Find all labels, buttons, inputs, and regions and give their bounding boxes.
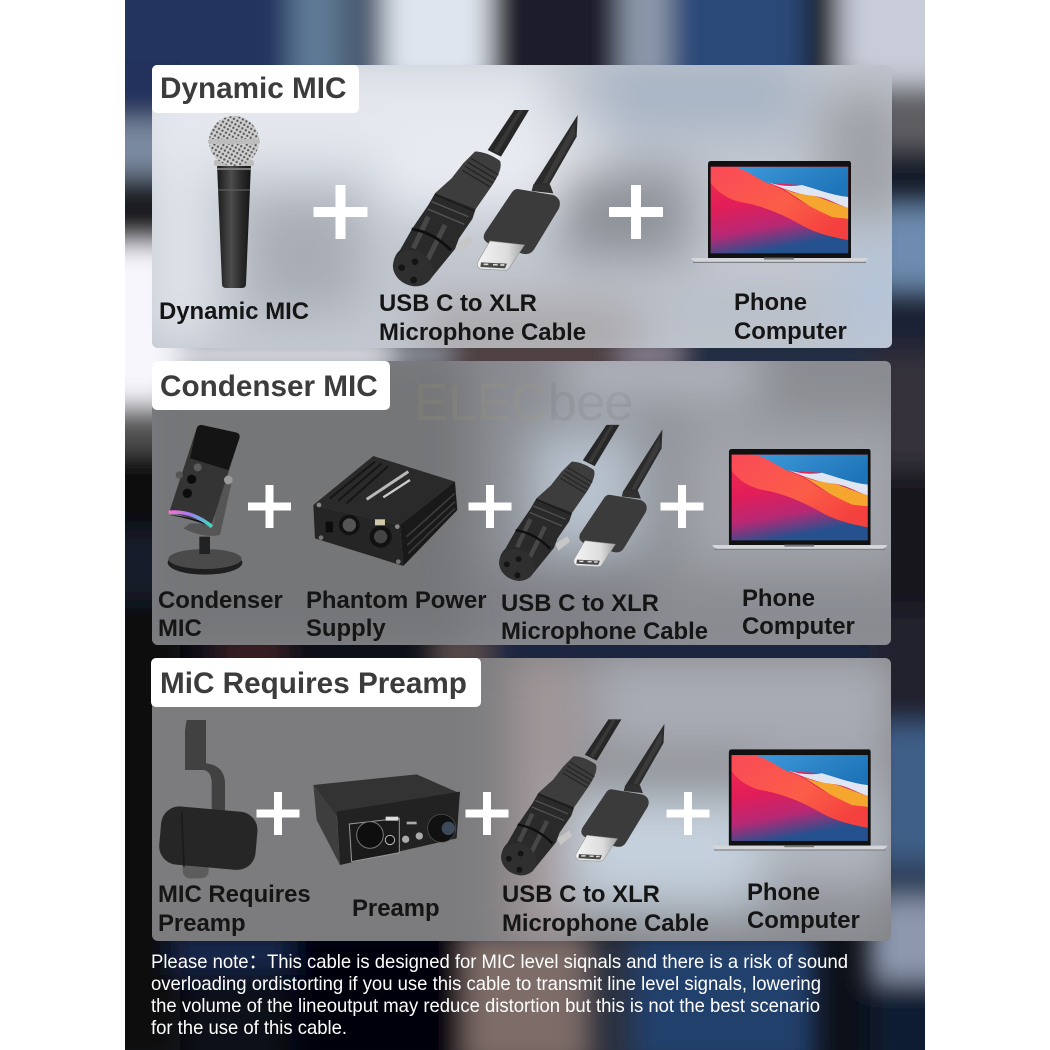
- icon: microphone with foam windscreen: [158, 720, 259, 878]
- panel: Dynamic MIC: [152, 65, 892, 348]
- text block: please note: [151, 951, 848, 1039]
- heading: Condenser MIC: [152, 361, 390, 410]
- icon: laptop: [691, 161, 868, 263]
- label: USB C to XLR Microphone Cable: USB C to XLR: [379, 290, 537, 317]
- label: Preamp: Preamp: [352, 895, 440, 922]
- label: USB C to XLR Microphone Cable: [501, 590, 708, 645]
- plus sign: [256, 792, 300, 835]
- plus sign: [466, 792, 508, 835]
- label: Phone Computer: Computer: [734, 318, 847, 345]
- plus sign: [314, 185, 368, 239]
- heading: MiC Requires Preamp: [151, 658, 481, 707]
- label: USB C to XLR Microphone Cable: Microphone Cable: [379, 319, 586, 346]
- watermark: ELECbee: [414, 374, 633, 432]
- text block: please note: the volume of the lineoutput may reduce distortion but this is not the best scenario: [151, 995, 820, 1017]
- icon: laptop: [712, 749, 888, 851]
- plus sign: [660, 485, 704, 528]
- label: Condenser MIC: Condenser: [158, 587, 283, 614]
- label: USB C to XLR Microphone Cable: [502, 881, 709, 937]
- heading: MiC Requires Preamp: MiC Requires Preamp: [160, 667, 467, 700]
- panel background: [152, 65, 892, 348]
- label: USB C to XLR Microphone Cable: USB C to XLR: [502, 881, 660, 908]
- label: Phone Computer: [747, 879, 860, 934]
- panel background: [152, 361, 891, 645]
- label: USB C to XLR Microphone Cable: Microphone Cable: [502, 910, 709, 937]
- panel: Condenser MIC: [152, 361, 891, 645]
- label: USB C to XLR Microphone Cable: Microphone Cable: [501, 618, 708, 645]
- label: USB C to XLR Microphone Cable: USB C to XLR: [501, 590, 659, 617]
- label: Dynamic MIC: Dynamic MIC: [159, 298, 309, 325]
- label: Phantom Power Supply: Supply: [306, 615, 386, 642]
- label: Phantom Power Supply: Phantom Power: [306, 587, 487, 614]
- panel: MIC Requires Preamp: [151, 650, 900, 955]
- icon: dynamic microphone: [208, 116, 260, 288]
- icon: condenser microphone: [168, 425, 242, 575]
- heading: Condenser MIC: Condenser MIC: [160, 370, 378, 403]
- text block: please note: overloading ordistorting if you use this cable to transmit line level signals, lowering: [151, 973, 821, 995]
- plus sign: [666, 792, 710, 835]
- heading: Dynamic MIC: [152, 65, 359, 113]
- label: USB C to XLR Microphone Cable: [379, 290, 586, 346]
- label: MIC Requires Preamp: Preamp: [158, 910, 246, 937]
- label: Phone Computer: Computer: [747, 907, 860, 934]
- text block: please note: Please note：This cable is designed for MIC level siqnals and there is a risk of sound: [151, 951, 848, 973]
- label: MIC Requires Preamp: MIC Requires: [158, 881, 311, 908]
- text block: please note: for the use of this cable.: [151, 1017, 347, 1039]
- label: Phone Computer: Phone: [734, 289, 807, 316]
- heading: Dynamic MIC: Dynamic MIC: [160, 72, 346, 105]
- label: Phone Computer: [734, 289, 847, 345]
- icon: USB C to XLR cable: [387, 110, 578, 293]
- plus sign: [609, 185, 663, 239]
- icon: laptop: [712, 449, 887, 550]
- panel background: [152, 650, 900, 955]
- icon: preamp box: [313, 774, 460, 865]
- label: Phone Computer: [742, 585, 855, 640]
- icon: phantom power supply: [313, 456, 457, 566]
- icon: USB C to XLR cable: [496, 719, 664, 881]
- label: Phone Computer: Phone: [747, 879, 820, 906]
- label: Condenser MIC: MIC: [158, 615, 202, 642]
- label: Condenser MIC: [158, 587, 283, 642]
- plus sign: [248, 485, 291, 528]
- label: Phone Computer: Computer: [742, 613, 855, 640]
- icon: USB C to XLR cable: [494, 425, 662, 587]
- label: Phone Computer: Phone: [742, 585, 815, 612]
- label: MIC Requires Preamp: [158, 881, 311, 937]
- plus sign: [468, 485, 512, 528]
- label: Phantom Power Supply: [306, 587, 487, 642]
